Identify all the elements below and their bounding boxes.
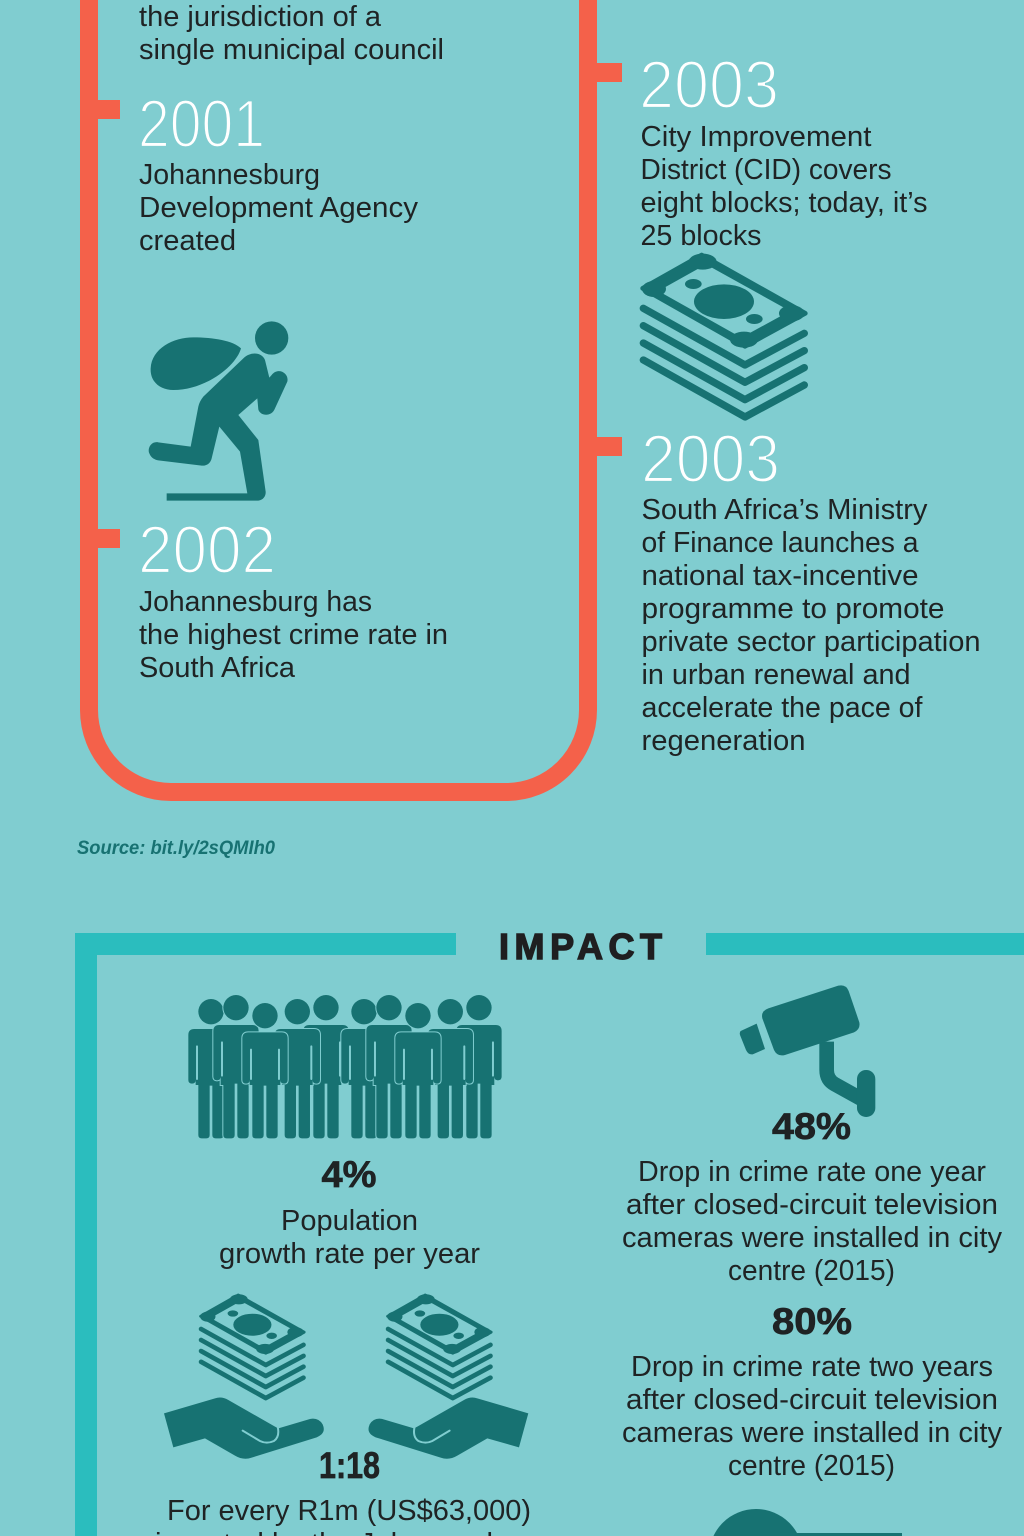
milestone: 2003 tax incentive: South Africa’s Ministry [642, 494, 928, 526]
stat: population growth: growth rate per year [219, 1238, 480, 1270]
heading: impact: IMPACT [499, 926, 662, 967]
milestone: 2001: Development Agency [139, 192, 419, 224]
milestone: 2003 tax incentive: 2003 [641, 421, 780, 497]
stat: 80% crime drop: Drop in crime rate two years [631, 1351, 993, 1383]
stat: 48% crime drop [622, 1106, 1002, 1287]
milestone: 2003 city improvement district: District (CID) covers [640, 154, 892, 186]
stat: population growth: Population [281, 1205, 418, 1237]
stat: 80% crime drop: 80% [772, 1301, 852, 1342]
text: council jurisdiction [139, 1, 444, 66]
milestone: 2003 city improvement district: 25 blocks [640, 220, 762, 252]
stat: 48% crime drop: centre (2015) [728, 1255, 895, 1287]
milestone: 2003 city improvement district: 2003 [639, 47, 779, 123]
timeline frame [89, 0, 622, 792]
stat: 48% crime drop: after closed-circuit television [626, 1189, 998, 1221]
stat: 48% crime drop: cameras were installed in city [622, 1222, 1002, 1254]
stat: 80% crime drop: cameras were installed in city [622, 1417, 1002, 1449]
icon: stack of banknotes [642, 254, 805, 417]
milestone: 2001: created [139, 225, 236, 257]
stat: 48% crime drop: Drop in crime rate one year [638, 1156, 986, 1188]
milestone: 2003 city improvement district: City Improvement [640, 121, 872, 153]
icon: security camera [740, 985, 875, 1117]
milestone: 2003 tax incentive: regeneration [642, 725, 806, 757]
stat: population growth: 4% [322, 1154, 376, 1195]
milestone: 2001: 2001 [138, 86, 265, 162]
milestone: 2003 tax incentive: private sector participation [642, 626, 980, 658]
milestone: 2002: 2002 [138, 512, 276, 588]
milestone: 2003 tax incentive [641, 421, 980, 757]
milestone: 2003 tax incentive: in urban renewal and [642, 659, 910, 691]
text: council jurisdiction: single municipal council [139, 34, 444, 66]
milestone: 2002: Johannesburg has [139, 586, 372, 618]
milestone: 2001 [138, 86, 419, 257]
stat: 1:18 leverage: 1:18 [319, 1445, 380, 1486]
milestone: 2002: South Africa [139, 652, 296, 684]
milestone: 2003 tax incentive: accelerate the pace of [642, 692, 923, 724]
stat: population growth [219, 1154, 480, 1270]
icon: thief with sack [149, 321, 288, 501]
milestone: 2003 tax incentive: national tax-incentive [642, 560, 918, 592]
milestone: 2002: the highest crime rate in [139, 619, 448, 651]
stat: 48% crime drop: 48% [772, 1106, 851, 1147]
milestone: 2003 city improvement district [639, 47, 928, 252]
milestone: 2001: Johannesburg [139, 159, 320, 191]
milestone: 2003 city improvement district: eight blocks; today, it’s [640, 187, 928, 219]
stat: 80% crime drop: after closed-circuit television [626, 1384, 998, 1416]
milestone: 2003 tax incentive: programme to promote [642, 593, 944, 625]
milestone: 2003 tax incentive: of Finance launches a [642, 527, 919, 559]
stat: 80% crime drop [622, 1301, 1002, 1482]
text: council jurisdiction: the jurisdiction of a [139, 1, 382, 33]
stat: 80% crime drop: centre (2015) [728, 1450, 895, 1482]
milestone: 2002 [138, 512, 448, 684]
impact panel frame [75, 933, 1024, 1536]
stat: 1:18 leverage: For every R1m (US$63,000) [167, 1495, 531, 1527]
source note: Source: bit.ly/2sQMIh0 [77, 838, 275, 859]
icon: hands holding banknotes [164, 1294, 528, 1459]
icon: crowd of people [188, 995, 502, 1138]
icon: partial key at page bottom [709, 1509, 902, 1536]
stat: 1:18 leverage [155, 1445, 545, 1536]
